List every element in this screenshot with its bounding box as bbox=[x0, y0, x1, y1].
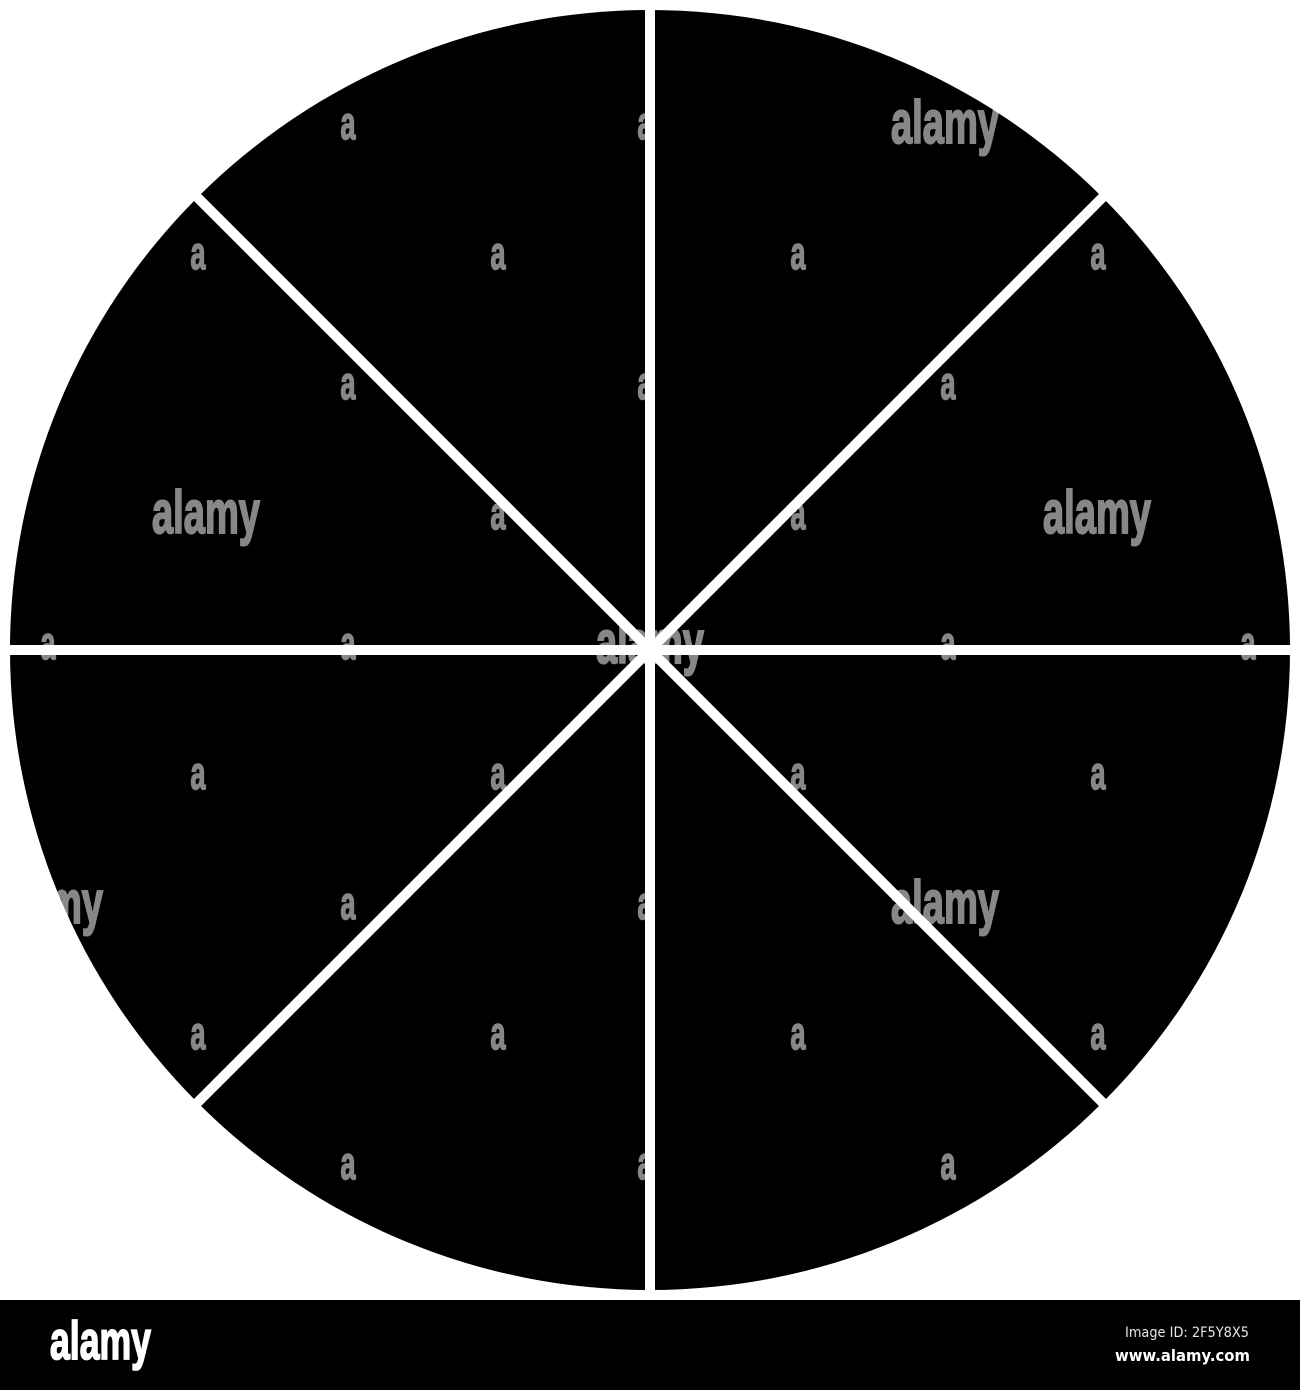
small watermarks: a bbox=[638, 1137, 653, 1189]
small watermarks: a bbox=[940, 357, 956, 409]
small watermarks: a bbox=[1090, 227, 1106, 279]
small watermarks: a bbox=[490, 227, 506, 279]
small watermarks: a bbox=[940, 1137, 956, 1189]
small watermarks: a bbox=[790, 227, 806, 279]
large watermarks: alamy bbox=[891, 869, 999, 936]
small watermarks: a bbox=[490, 487, 506, 539]
small watermarks: a bbox=[340, 877, 356, 929]
small watermarks: a bbox=[190, 747, 206, 799]
small watermarks: a bbox=[940, 617, 956, 669]
small watermarks: a bbox=[638, 357, 653, 409]
small watermarks: a bbox=[638, 97, 653, 149]
small watermarks: a bbox=[340, 357, 356, 409]
small watermarks: a bbox=[340, 1137, 356, 1189]
small watermarks: a bbox=[1090, 747, 1106, 799]
large watermarks: alamy bbox=[891, 89, 999, 156]
small watermarks: a bbox=[790, 747, 806, 799]
small watermarks: a bbox=[790, 1007, 806, 1059]
small watermarks: a bbox=[190, 1007, 206, 1059]
small watermarks: a bbox=[340, 97, 356, 149]
small watermarks: a bbox=[638, 877, 653, 929]
large watermarks: alamy bbox=[596, 609, 704, 676]
image id: Image ID: 2F5Y8X5 bbox=[1125, 1325, 1249, 1341]
footer bar bbox=[0, 1300, 1300, 1390]
footer logo: alamy bbox=[50, 1311, 151, 1371]
large watermarks: alamy bbox=[0, 869, 103, 936]
small watermarks: a bbox=[1090, 1007, 1106, 1059]
small watermarks: a bbox=[1240, 617, 1256, 669]
small watermarks: a bbox=[40, 617, 56, 669]
small watermarks: a bbox=[490, 1007, 506, 1059]
small watermarks: a bbox=[340, 617, 356, 669]
small watermarks: a bbox=[490, 747, 506, 799]
small watermarks: a bbox=[790, 487, 806, 539]
small watermarks bbox=[40, 97, 1256, 1189]
large watermarks: alamy bbox=[152, 479, 260, 546]
large watermarks: alamy bbox=[1043, 479, 1151, 546]
small watermarks: a bbox=[190, 227, 206, 279]
website url: www.alamy.com bbox=[1115, 1346, 1250, 1365]
large watermarks bbox=[0, 89, 1151, 936]
